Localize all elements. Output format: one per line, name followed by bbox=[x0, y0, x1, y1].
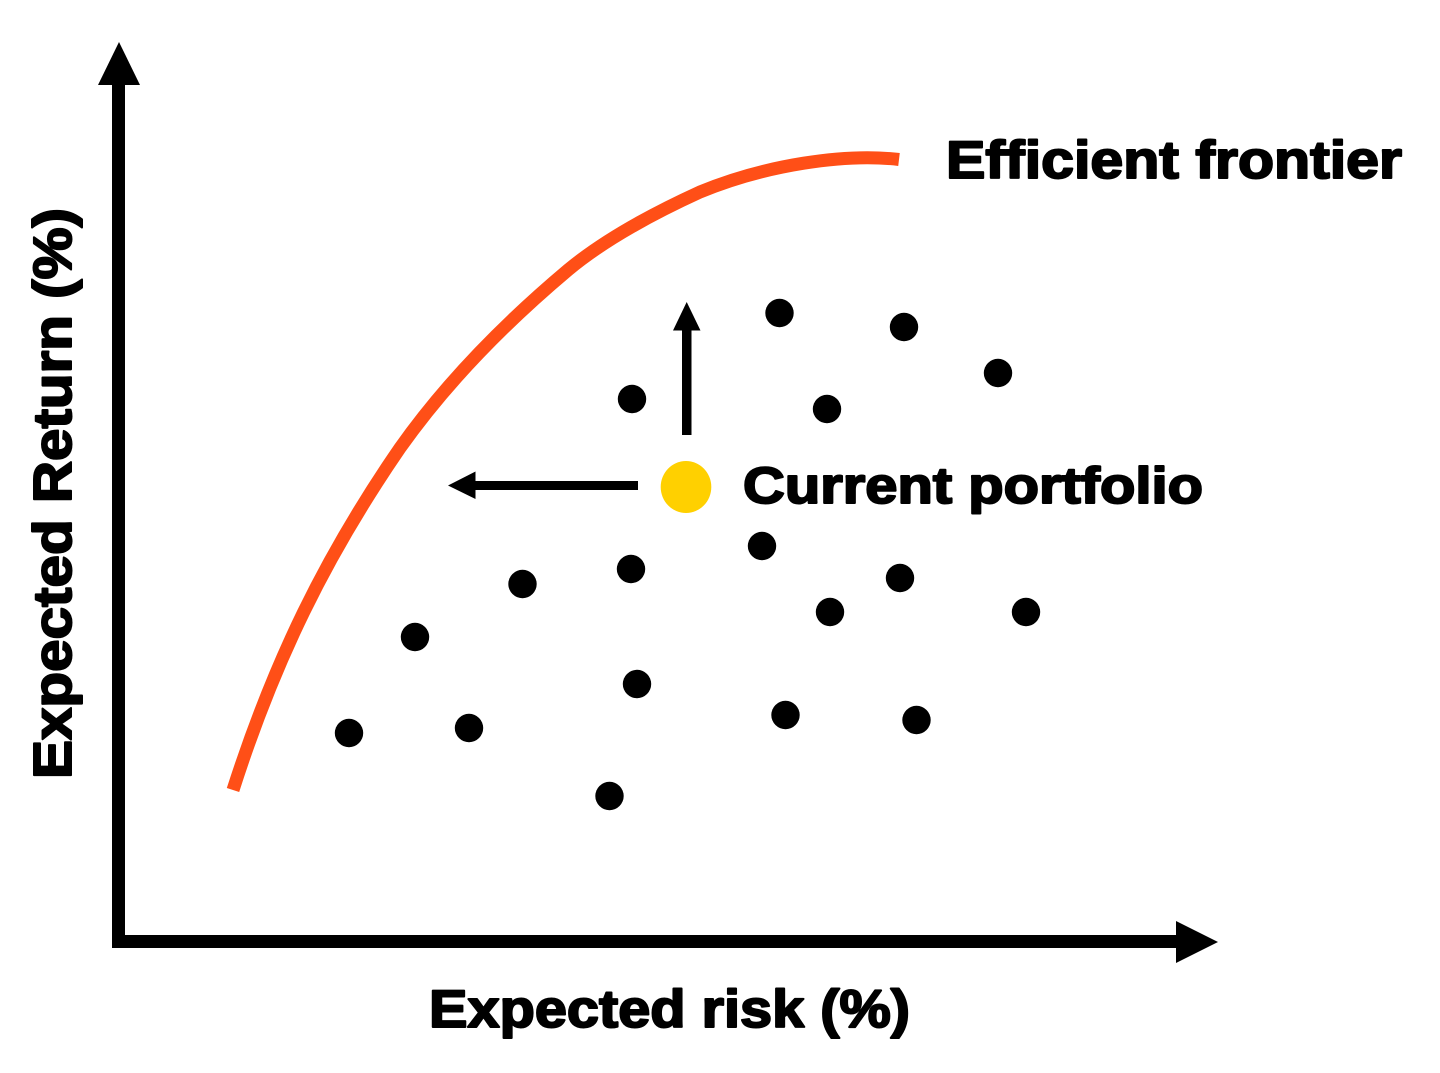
arrow: reduce risk bbox=[448, 472, 638, 499]
x axis arrow bbox=[112, 921, 1218, 963]
y axis label: Expected Return (%) bbox=[23, 208, 83, 779]
current portfolio label: Current portfolio bbox=[743, 457, 1203, 514]
efficient frontier curve bbox=[233, 158, 899, 790]
efficient frontier label: Efficient frontier bbox=[946, 131, 1402, 190]
scatter of portfolios bbox=[335, 299, 1040, 810]
x axis label: Expected risk (%) bbox=[429, 980, 910, 1039]
arrow: increase return bbox=[673, 302, 700, 435]
y axis arrow bbox=[98, 42, 140, 948]
current portfolio marker bbox=[661, 461, 711, 513]
